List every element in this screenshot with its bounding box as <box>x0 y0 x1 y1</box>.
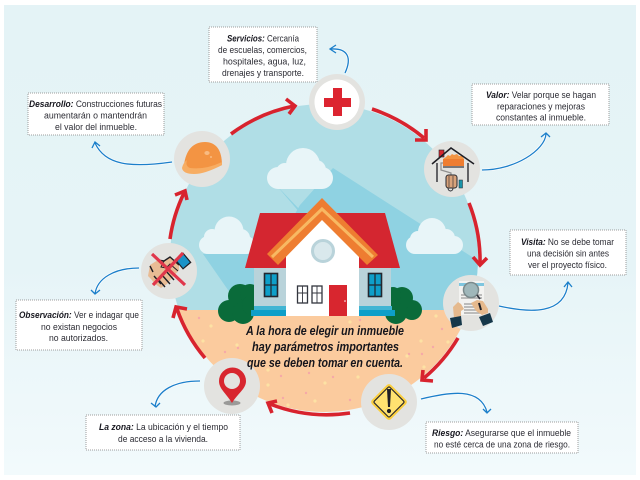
arrow: riesgo callout <box>421 393 491 413</box>
house <box>245 198 400 316</box>
arrow: valor to visita <box>469 203 487 265</box>
icon: servicios red cross <box>309 74 365 130</box>
main message: que se deben tomar en cuenta. <box>247 355 403 370</box>
icon: desarrollo hard hat <box>174 131 230 187</box>
red cycle arrows <box>170 99 487 415</box>
window right <box>368 273 382 296</box>
callout: desarrollo: aumentarán o mantendrán <box>44 110 147 122</box>
facade <box>286 219 359 316</box>
cloud top <box>267 148 333 189</box>
main message: hay parámetros importantes <box>252 339 399 354</box>
arrow: visita callout <box>499 282 572 310</box>
callout: riesgo <box>426 422 578 453</box>
callout: servicios: de escuelas, comercios, <box>218 45 307 56</box>
callout: valor: reparaciones y mejoras <box>497 102 585 112</box>
arrow: visita to riesgo <box>422 338 458 381</box>
main message <box>245 323 404 370</box>
callout: valor: Valor: Velar porque se hagan <box>486 90 596 101</box>
callout: visita: Visita: No se debe tomar <box>521 237 615 248</box>
sky disc <box>160 100 490 312</box>
main message: A la hora de elegir un inmueble <box>245 323 404 338</box>
arrow: riesgo to la zona <box>268 401 350 415</box>
callout: valor <box>472 84 609 125</box>
window left <box>264 273 278 296</box>
cloud left <box>199 216 255 254</box>
arrow: servicios to valor <box>372 109 426 140</box>
arrow: observacion to desarrollo <box>170 191 187 239</box>
callout: servicios <box>209 27 317 82</box>
arrow: valor callout <box>482 133 550 170</box>
callout: riesgo: no esté cerca de una zona de riesgo. <box>434 440 570 450</box>
arrow: observacion callout <box>91 268 139 294</box>
arrow: desarrollo callout <box>92 142 172 165</box>
arrow: servicios callout <box>330 45 348 73</box>
roof <box>245 213 400 268</box>
callout: desarrollo <box>28 93 164 135</box>
central scene <box>170 104 478 412</box>
callout: riesgo: Riesgo: Asegurarse que el inmueble <box>432 428 571 439</box>
arrow: desarrollo to servicios <box>231 99 295 134</box>
callout: la zona <box>86 415 240 450</box>
blue connector arrows <box>91 45 572 413</box>
callout: la zona: de acceso a la vivienda. <box>118 434 208 445</box>
callout: observacion <box>16 300 142 350</box>
icon: visita document and magnifier <box>443 275 499 331</box>
icon: riesgo warning sign <box>361 374 417 430</box>
callout: visita: una decisión sin antes <box>527 248 609 260</box>
callout: observacion: no autorizados. <box>49 333 108 344</box>
bushes <box>218 284 422 324</box>
arrow: la zona callout <box>151 381 200 407</box>
centre windows <box>297 286 322 303</box>
callout: valor: constantes al inmueble. <box>496 112 586 124</box>
callout: la zona: La zona: La ubicación y el tiempo <box>99 422 228 433</box>
callout: visita: ver el proyecto físico. <box>528 260 607 271</box>
arrow: la zona to observacion <box>173 307 205 358</box>
icon: valor house and roller <box>424 141 480 197</box>
callout: observacion: Observación: Ver e indagar que <box>19 310 139 321</box>
callout: desarrollo: el valor del inmueble. <box>55 122 137 133</box>
callout: desarrollo: Desarrollo: Construcciones futuras <box>29 99 162 110</box>
callout: visita <box>510 230 626 275</box>
callout: servicios: Servicios: Cercanía <box>227 34 300 44</box>
cloud right <box>406 218 463 254</box>
wings <box>254 268 391 307</box>
icon: observacion crossed handshake <box>141 243 197 299</box>
icon: la zona map pin <box>204 358 260 414</box>
door <box>329 285 347 316</box>
round vent <box>312 240 334 262</box>
callout: servicios: hospitales, agua, luz, <box>223 56 306 68</box>
ground <box>179 310 460 412</box>
callout: observacion: no existan negocios <box>41 322 117 333</box>
callout: servicios: drenajes y transporte. <box>222 68 304 79</box>
gable <box>267 198 378 265</box>
